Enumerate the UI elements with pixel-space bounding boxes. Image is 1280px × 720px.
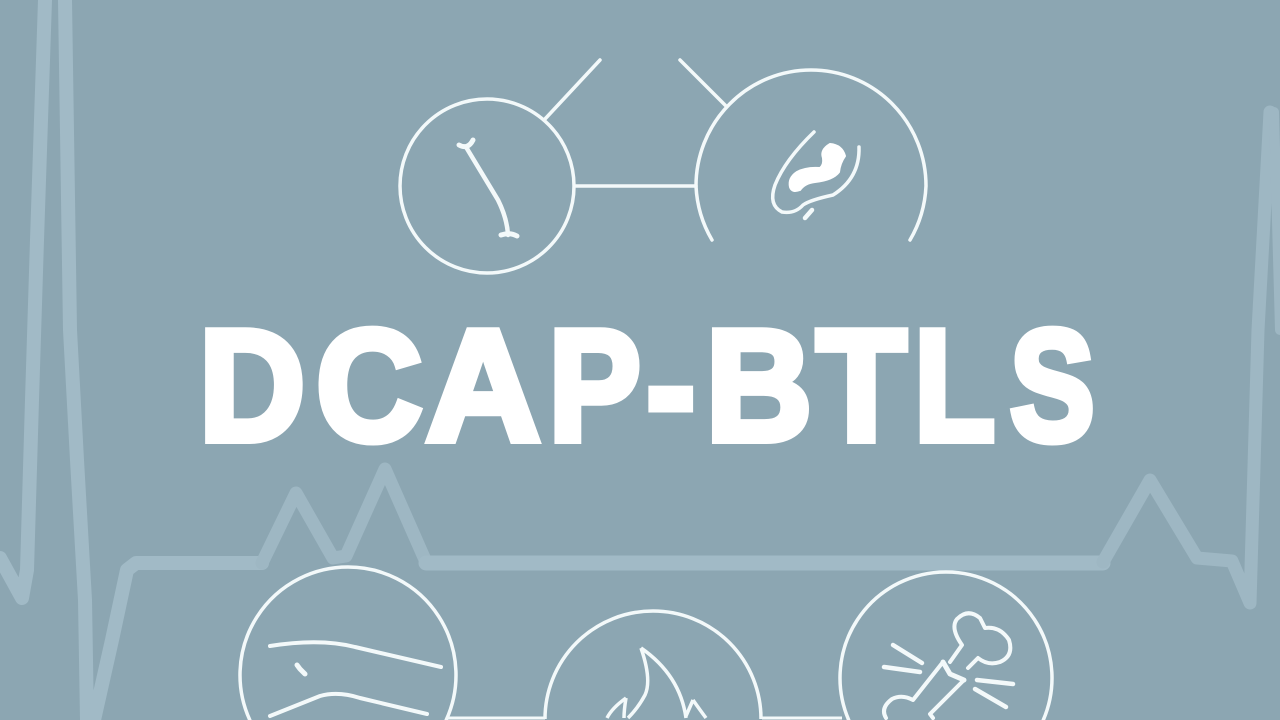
title: - [646,298,695,474]
circle icon: broken bone [840,572,1052,720]
title: D [199,298,305,474]
circle icon: long bone deformity [400,99,574,273]
circle icon: burn flame [545,611,761,719]
title: P [549,298,641,474]
title: S [1010,298,1095,474]
title: A [426,298,540,474]
title: L [914,298,995,474]
circle icon: skin abrasion [240,567,456,720]
circle icon: abdomen with baby [696,70,926,240]
title: C [316,298,422,474]
title: T [817,298,906,474]
bottom connector lines [447,716,842,720]
title: B [706,298,812,474]
top connector lines [545,60,726,186]
